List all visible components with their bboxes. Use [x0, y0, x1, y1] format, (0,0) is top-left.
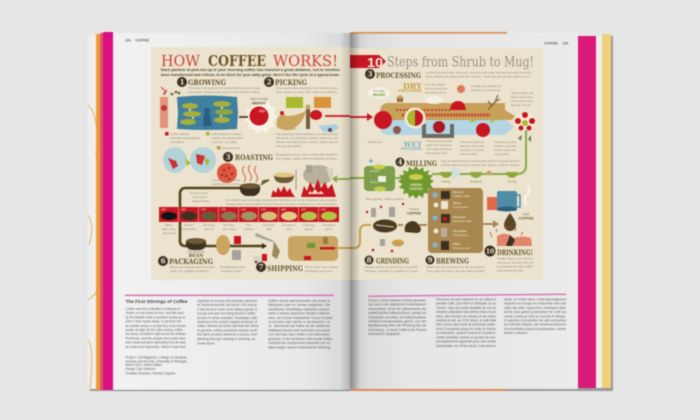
step 3 roasting heading	[223, 152, 339, 162]
icon: second pan with flames	[271, 170, 296, 197]
step 3 processing heading: PROCESSING	[376, 71, 421, 80]
panel: brewing methods: Stovetop pot	[453, 233, 468, 237]
icon: plane, truck, ship	[253, 233, 280, 263]
article column 3 german: xiere, um in einen ekstatischen Trance-Zustand	[268, 316, 333, 320]
text: roast level labels: Yellowing:	[303, 223, 316, 227]
icon: coffee berry with starburst: BERRY	[252, 100, 266, 106]
text: roast level labels: French:	[184, 223, 194, 227]
icon: industrial roaster with flames	[301, 165, 336, 197]
map: coffee growing regions globe	[163, 147, 216, 173]
callout: the coffee beans	[368, 87, 390, 99]
article column 6 french: les mêmes étapes, de l'ensemencement	[504, 323, 566, 327]
text: roast level labels	[162, 223, 336, 235]
text: picking description: berries are picked, then sorted; unripe greens	[276, 140, 339, 144]
chart: roast level strip: 380°	[281, 208, 286, 212]
legend: coffee species: • more harsh, more caffeine	[211, 140, 237, 144]
icon: red cup and coffee bag	[232, 236, 241, 260]
panel: brewing methods: Turkish, Greek	[453, 194, 471, 198]
article column 5 french: éveillés la nuit. Au XVIe siècle, le café était	[436, 318, 496, 322]
page header left: 224 COFFEE	[125, 38, 150, 42]
step 4 milling heading: MILLING	[406, 159, 437, 168]
article column 3 german: Äthiopien oder im Jemen angebaut. Die	[268, 303, 331, 307]
chart: roast level strip: 400°	[261, 208, 266, 212]
article column 3 german: gebracht. In der westlichen Welt wurde Kaffee	[268, 337, 333, 341]
step 6 packaging heading: PACKAGING	[169, 257, 213, 266]
pipe: roasted beans brown route	[180, 188, 262, 246]
step 6 packaging heading: instruction of ship	[221, 269, 241, 273]
step 3 roasting heading: By applying heat, green coffee will transform	[276, 152, 339, 156]
article column 5 french: bien connu dans toute la péninsule arabe,	[436, 323, 496, 327]
article column 4 german: Europa zu einem beliebten Getränk geworden,	[368, 298, 426, 302]
article column 3 german: schiitischen Schädhiliya-Sufisekten verwen-	[268, 307, 330, 311]
step 6 packaging heading: taste, dry, airtight containers.	[170, 269, 210, 273]
label: wet processing: Parchment	[368, 140, 382, 144]
label: wet processing: more green.	[494, 152, 510, 156]
intro text: been transformed and refined, to be there for your daily grind. Here's the life cycle of a typical bean:	[161, 73, 340, 77]
step 1 growing heading: evergreen, that provide most of the world's coffee:	[188, 90, 260, 94]
step 3 roasting heading: into fragile, easily opened packets of flavor.	[276, 156, 338, 160]
article column 3 german: deten in seinem mystischen Ritualen Kaffeeeli-	[268, 312, 330, 316]
page header right: COFFEE 225	[544, 42, 568, 46]
step 2 picking heading: Five years after planting, and berries ripen	[276, 86, 338, 90]
text: roast level labels: green	[325, 227, 333, 231]
article column 3 german	[268, 299, 333, 350]
project credits: Creative Direction: Patricia Claydon	[126, 372, 176, 376]
step 1 growing heading: 1	[180, 78, 185, 86]
step 2 picking heading: from green to red, the color of a cherry.	[276, 90, 338, 94]
label: wet processing: PROCESSING	[401, 147, 423, 151]
icon: common bean pan: BEAN	[189, 253, 203, 259]
article column 3 german: Halbinsel bereits weit verbreitet und wurde	[268, 328, 331, 332]
step 9 brewing heading: 9	[428, 256, 433, 264]
label: wet processing: sun-dried or removed	[460, 148, 484, 152]
project credits	[126, 356, 188, 376]
article column 5 french: Personne ne sait vraiment où se cultiva le	[436, 298, 496, 302]
arrow: green arrow into roaster	[332, 175, 350, 183]
step 8 grinding heading: 8	[367, 256, 372, 264]
icon: burlap sack	[216, 235, 230, 255]
step 8 grinding heading: fineness, whether by machine or hand.	[365, 269, 418, 273]
icon: ground coffee pile	[405, 207, 422, 233]
project credits: Science and the Arts, University of Michigan,	[126, 359, 188, 363]
pipe: tan route to grinder	[350, 225, 371, 248]
rule right	[368, 294, 566, 297]
legend: coffee species: • less caffeine	[170, 140, 184, 144]
panel: brewing methods: Espresso, moka	[453, 219, 472, 223]
chart: roast level strip: 350°	[301, 208, 306, 212]
icon: coffee berry with starburst: THE COFFEE	[250, 97, 268, 101]
icon: ground coffee pile: COFFEE	[407, 212, 422, 216]
step 3 processing heading	[365, 69, 531, 80]
legend: coffee species: both grown here	[222, 146, 240, 150]
article column 1: Coffee was first cultivated in Ethiopia or	[126, 307, 181, 311]
article column 3 german: zunächst als Luxusprodukt betrachtet und vor	[268, 341, 331, 345]
article column 1: elixir in their mystic rituals, to aid them into	[126, 320, 182, 324]
pipe: orange route to grinding	[338, 247, 352, 249]
title: WORKS!	[273, 52, 338, 70]
text: roast level labels: sour	[286, 227, 292, 231]
label: wet processing: WET	[403, 140, 423, 149]
step 2 picking heading	[264, 77, 338, 94]
icon: green coffee starburst: GREEN	[410, 183, 422, 187]
article column 2: it had become much more widely popular in	[197, 307, 258, 311]
article column 4 german: das man in den städtischen Kaffeehäusern	[368, 303, 427, 307]
step 3 processing heading: 3	[368, 70, 373, 78]
chart: roast level strip: 480°	[161, 208, 166, 212]
step 2 picking heading: 2	[267, 78, 272, 86]
text: roast level labels: medium	[244, 227, 255, 231]
label: wet processing: The wet process	[494, 140, 517, 144]
legend: coffee species: Coffee canephora ("robusta"):	[211, 132, 243, 136]
article column 3 german: zu kommen oder nachts zu durchwachen. Im	[268, 320, 331, 324]
step 10 drinking heading	[484, 246, 533, 272]
icon: coffee flower	[515, 112, 535, 142]
label: dry processing: berries are spread, then	[425, 86, 447, 90]
article column 6 french: et la torréfaction jusqu'à la préparation, comme	[504, 327, 566, 331]
article column 5 french: il était considéré comme un produit de luxe,	[436, 335, 496, 339]
label: dry processing: In the older, cheaper	[425, 82, 445, 86]
map: shipping destination	[288, 236, 338, 261]
step 4 milling heading: coffee will become sorted into "green coffee" beans.	[441, 163, 520, 167]
step 8 grinding heading: GRINDING	[376, 256, 409, 266]
text: roast level labels: light oil	[204, 227, 214, 231]
article column 6 french	[504, 298, 566, 335]
arrow: packaging to shipping	[262, 243, 267, 249]
step 7 shipping heading: SHIPPING	[267, 264, 303, 273]
gutter shadow	[340, 33, 360, 390]
article column 2: its medicinal benefits. But by the 17th century,	[197, 303, 257, 307]
icon: green coffee starburst: COFFEE	[409, 187, 423, 191]
label: wet processing: water and squeezed.	[426, 143, 452, 147]
article column 6 french: cafés des villes. Aujourd'hui, l'Amérique latine	[504, 306, 566, 310]
article column 6 french: siècle, au XVIIIe siècle, il était déjà largement	[504, 298, 566, 302]
step 10 drinking heading: pick-me-up, and now that you	[497, 260, 533, 264]
step 9 brewing heading: many ways, but these are the main methods.	[426, 269, 485, 273]
icon: ground coffee pile: Ground	[409, 207, 419, 211]
icon: milling bowls: Hulling	[442, 180, 451, 184]
article column 5 french: médicinales. Au XVIIe siècle, il est devenu	[436, 344, 496, 348]
text: roast level labels: Viennese:	[203, 223, 216, 227]
text: roasting captions: Chemical reactions inside	[212, 178, 240, 182]
label: wet processing	[368, 139, 517, 156]
label: wet processing: They are fermented and	[460, 140, 484, 144]
article column 3 german: von dort aus nach Indien und Indonesien	[268, 333, 331, 337]
legend: coffee species	[165, 132, 243, 150]
step 9 brewing heading: Water can be introduced to the grounds in	[426, 265, 485, 269]
text: roast level labels: bittersweet,	[182, 227, 197, 231]
article column 4 german: Zubereitung – in dieser Grafik ist der Prozess	[368, 328, 427, 332]
icon: berry cross section	[404, 108, 426, 128]
legend: coffee species: Coffee arabica:	[170, 132, 190, 136]
panel: sorting green box: Sizing	[370, 181, 377, 184]
step 7 shipping heading: Don't fear! Your Coffee	[305, 265, 338, 269]
label: wet processing: fermented here.	[426, 151, 448, 155]
article column 5 french: l'Arabie utilisaient des élixirs dans leurs	[436, 310, 496, 314]
text: roast level labels: dark, shiny,	[162, 227, 176, 231]
icon: milling bowls: Polishing	[470, 180, 482, 184]
panel: sorting green box	[364, 159, 395, 192]
text: roasting captions: The first second cracks	[190, 191, 208, 195]
icon: steam lines	[242, 165, 258, 182]
panel: brewing methods: Percolate	[453, 229, 467, 233]
chart: roast level strip: 465°	[181, 208, 186, 212]
article column 1: Peninsula, and the people who could have	[126, 336, 186, 340]
article column 1: awake at night. By the 16th century, coffee,	[126, 328, 184, 332]
article column 4 german: Bepflanzung über die Röstung bis zur	[368, 324, 427, 328]
step 6 packaging heading: Beans are naturally and end users	[170, 265, 216, 269]
step 1 growing heading	[177, 77, 261, 94]
article column 2: houses in urban societies. Nowadays Latin	[197, 316, 258, 320]
article column 1: the beany, considered right across the Arabian	[126, 332, 186, 336]
step 4 milling heading: Any remaining fruit or parchment will be removed and the	[441, 159, 520, 163]
article column 5 french: Yémen, mais des soufis shadhilis de sud de	[436, 306, 496, 310]
label: wet processing: Then, pulped berries are	[426, 147, 452, 151]
icon: coffee berry with starburst	[239, 97, 277, 134]
step 1 growing heading: GROWING	[188, 78, 226, 87]
title	[161, 52, 338, 70]
chart: dry processing band	[380, 95, 515, 120]
chart: roast level strip: 420°	[241, 208, 246, 212]
label: dry processing	[399, 81, 533, 107]
article column 1: been instrumental in spreading it as far east	[126, 341, 186, 345]
text: roasting captions	[190, 178, 338, 206]
text: roast level labels: Cinnamon:	[282, 223, 296, 227]
icon: drinker face	[490, 226, 532, 246]
step 7 shipping heading	[256, 262, 338, 273]
article column 4 german	[368, 298, 427, 336]
panel: brewing methods: Steep	[453, 201, 461, 205]
step 3 processing heading: berry, leaving the seeds (aka the "beans"). There are two primary ways to do it:	[426, 74, 531, 78]
icon: coffee drop: Liquid	[523, 213, 530, 216]
heading: steps from shrub to mug: Steps from Shrub to Mug!	[387, 54, 534, 70]
panel: right infographic poster	[350, 48, 543, 280]
arrow: brewing to drinking	[483, 220, 499, 228]
icon: common bean pan	[186, 238, 206, 259]
label: dry processing: the pulp of it out.	[511, 103, 531, 107]
article column 6 french: En général, la production de café suit partout	[504, 318, 566, 322]
step 8 grinding heading	[364, 256, 419, 273]
text: roasting captions: make flavors, oil, and bite.	[212, 182, 240, 186]
article column 4 german: verläuft normalerweise gleich, von der	[368, 320, 427, 324]
article column 5 french: principalement apprécié pour ses vertus	[436, 340, 496, 344]
text: picking description: Harvested by hand picking, one cherry berry	[276, 132, 339, 136]
article column 1	[126, 307, 186, 349]
step 3 processing heading: In this important step, the outer covering and pulpy fruit are removed from the	[426, 70, 531, 74]
callout: the coffee beans: BEANS	[373, 93, 386, 97]
label: dry processing: expensive, but they're dry.	[471, 88, 501, 92]
step 1 growing heading: There are two species of tropical plants, both mostly	[188, 86, 261, 90]
legend: coffee species: • hardier, low altitude plants	[211, 136, 243, 140]
label: dry processing: dried naturally in the sun.	[425, 90, 447, 94]
text: roasting captions: crucial, bean's	[192, 195, 207, 199]
text: roast level labels: light	[266, 227, 272, 231]
article column 6 french: est le plus grand producteur de café au	[504, 310, 566, 314]
chart: roast level strip: 435°	[221, 208, 226, 212]
text: roasting captions: It's usually done with large commercial machines, but home roasting is also possible.	[226, 198, 338, 202]
title: COFFEE	[208, 52, 266, 70]
article column 1: by the Shadhili Sufis of southern Arabia as an	[126, 315, 186, 319]
article column 2	[197, 299, 259, 346]
step 2 picking heading: PICKING	[275, 78, 307, 87]
article column 3 german: allem wegen seiner medizinischen Wirkung	[268, 346, 331, 350]
chart: roast level strip	[159, 207, 339, 222]
icon: milling bowls: Sorting	[507, 180, 517, 184]
article column 5 french: en Indonésie. Quand il arriva en Occident,	[436, 331, 496, 335]
banner: 10 steps: 10	[367, 55, 383, 70]
article column 3 german: Kaffee wurde wahrscheinlich als erstes in	[268, 299, 331, 303]
step 3 roasting heading: 3	[226, 152, 231, 162]
book: page block and colored edges	[88, 32, 613, 391]
label: wet processing: The pulp is removed with	[426, 139, 452, 143]
panel: brewing methods: Filter	[453, 242, 461, 246]
article column 1: an ecstatic trance or so that they could remain	[126, 324, 186, 328]
step 3 roasting heading: ROASTING	[235, 153, 273, 162]
article column 2: Europe and was now being drunk in coffee	[197, 312, 256, 316]
step 7 shipping heading: 7	[259, 262, 264, 272]
step 10 drinking heading: 10	[486, 248, 494, 256]
icon: roasting pan	[240, 180, 269, 196]
panel: brewing methods: Pressure	[453, 215, 466, 219]
step 9 brewing heading: BREWING	[436, 256, 469, 266]
panel: left infographic poster	[151, 47, 352, 280]
step 6 packaging heading: 6	[161, 256, 166, 266]
text: roast level labels: rich, toasty	[222, 227, 237, 231]
icon: aroma molecule bubble	[217, 163, 237, 183]
article column 3 german: 16. Jahrhundert war Kaffee auf der arabischen	[268, 324, 331, 328]
icon: large red berry with arrow	[350, 111, 392, 129]
text: roast level labels: Italian:	[165, 223, 173, 227]
article column 2: coffee, followed by South-east Asia then Africa.	[197, 324, 259, 328]
panel: brewing methods: Decoct	[453, 190, 463, 194]
arrow: red arrow picking to processing	[325, 115, 350, 117]
text: picking description	[276, 132, 339, 148]
text: roasting captions: sweetness changes	[192, 199, 209, 203]
label: wet processing: is faster, improves	[494, 144, 517, 148]
article column 4 german: Südostasien und Afrika. Die Kaffeeproduktion	[368, 315, 426, 319]
article column 5 french: premier café, peut-être en Éthiopie ou au	[436, 301, 496, 306]
project credits: March 2012, United States	[126, 363, 162, 367]
chart: roast level strip: 445°	[201, 208, 206, 212]
project credits: Project: LSA Magazine, College of Literature,	[126, 356, 188, 360]
icon: green coffee starburst	[398, 166, 434, 199]
icon: pink farmer figure	[160, 87, 180, 128]
article column 6 french: illustré ci-dessus.	[504, 331, 528, 335]
icon: coffee drop: COFFEE	[518, 216, 534, 220]
banner: 10 steps	[350, 55, 386, 70]
article column 6 french: répandu en Europe et consommé dans les	[504, 302, 566, 306]
callout: the coffee beans: The coffee	[373, 89, 386, 93]
article column 1: Yemen, no one knows for sure, and was used	[126, 311, 184, 315]
article column 5 french	[436, 298, 497, 348]
step 8 grinding heading: Beans will be ground into a specific	[365, 265, 419, 269]
label: wet processing: cover their hand.	[460, 152, 478, 156]
article column 2: shown above.	[197, 342, 215, 346]
step 7 shipping heading: is headed your way!	[305, 269, 333, 273]
icon: grinder and grounds: Burr grinding	[366, 197, 383, 201]
icon: grinder and grounds	[366, 197, 427, 252]
icon: blue mug with hand	[487, 185, 530, 212]
label: dry processing: In climate, most laborious and	[471, 84, 501, 88]
step 10 drinking heading: know what the little coffee	[497, 264, 533, 268]
icon: coffee drop	[504, 213, 534, 231]
intro text	[161, 68, 340, 77]
label: dry processing: After it's dried, the	[511, 91, 533, 95]
article column 4 german: anschaulich dargestellt.	[368, 332, 400, 336]
panel: sorting green box: Sort/hull	[370, 170, 380, 173]
step 6 packaging heading	[158, 256, 245, 273]
article column 6 french: monde, suivie par l'Asie du Sud-Est et l'Afrique.	[504, 314, 566, 318]
chart: roast level strip: 300°	[321, 208, 326, 212]
rule left	[125, 294, 334, 296]
step 10 drinking heading: Finally! Enjoy your morning	[497, 256, 533, 260]
article column 2: regarded as a luxury and primarily valued for	[197, 299, 258, 303]
icon: common bean pan: The Common	[188, 250, 205, 254]
text: roast level labels: Full City:	[223, 223, 235, 227]
illustration: picking scene: ●●●	[291, 127, 297, 131]
title: HOW	[161, 52, 201, 70]
label: dry processing: PROCESSING	[399, 89, 422, 93]
illustration: coffee plantation panel	[177, 96, 238, 130]
icon: grinder and grounds: Blade grinders	[385, 197, 404, 201]
article column 2: America is the world's largest producer of	[197, 320, 257, 324]
article column 2: planting through roasting to brewing, as	[197, 337, 256, 341]
panel: brewing methods	[428, 188, 483, 253]
text: roast level labels: grassy	[305, 227, 314, 231]
step 4 milling heading	[396, 158, 520, 168]
chart: wet processing band	[380, 119, 514, 138]
text: roast level labels: City:	[246, 223, 252, 227]
article heading: The First Stirrings of Coffee	[126, 299, 188, 305]
step 10 drinking heading: DRINKING!	[497, 248, 533, 257]
label: wet processing: washed in tanks, then	[460, 144, 484, 148]
text: roast level labels: American:	[262, 223, 276, 227]
panel: brewing methods: French press	[453, 205, 469, 209]
text: roast level labels: oily, burnt	[163, 231, 175, 235]
article column 5 french: d'où il s'exporta jusqu'en Inde et même	[436, 327, 496, 331]
project credits: Design: Dan Zettwoch	[126, 367, 156, 371]
label: dry processing: will be hulled to remove	[511, 99, 533, 103]
step 9 brewing heading	[426, 256, 485, 273]
panel: brewing methods: Drip, pour-over	[453, 246, 470, 250]
intro text: Each particle of pick-me-up in your morning coffee has traveled a great distance, not to mention	[161, 68, 340, 72]
step 6 packaging heading: Decaffeinating and	[220, 265, 245, 269]
text: roasting captions: Temperature and duration of heat impact a bean's consistency, color and flavor.	[226, 202, 338, 206]
label: wet processing: and the berries are	[494, 148, 516, 152]
article column 1: as India and Indonesia. When it was first	[126, 345, 186, 349]
legend: coffee species: • best flavor at high altitudes	[170, 136, 200, 140]
article column 5 french: rites, afin d'entrer en transe et de rester	[436, 314, 497, 318]
article column 2: In general, coffee production follows much	[197, 328, 258, 332]
text: picking description: ones are also picked.	[276, 144, 302, 148]
step 4 milling heading: 4	[398, 158, 403, 166]
pipe: green route to milling	[350, 130, 526, 178]
article column 4 german: konsumierte. Heute ist Lateinamerika der	[368, 307, 427, 311]
icon: milling bowls	[440, 168, 518, 184]
label: dry processing: whole, broken berry	[511, 95, 533, 99]
text: picking description: (the picker of 2 shrub) by machine. Often red, ripe	[276, 136, 338, 140]
label: dry processing: DRY	[403, 81, 422, 91]
illustration: picking scene	[277, 97, 339, 132]
article column 2: the same process wherever it occurs, from	[197, 333, 258, 337]
article column 4 german: weltweit größte Kaffeeproduzent, gefolgt von	[368, 311, 427, 315]
step 10 drinking heading: bean has been through.	[497, 268, 523, 272]
text: roast level labels: Unroasted:	[322, 223, 336, 227]
